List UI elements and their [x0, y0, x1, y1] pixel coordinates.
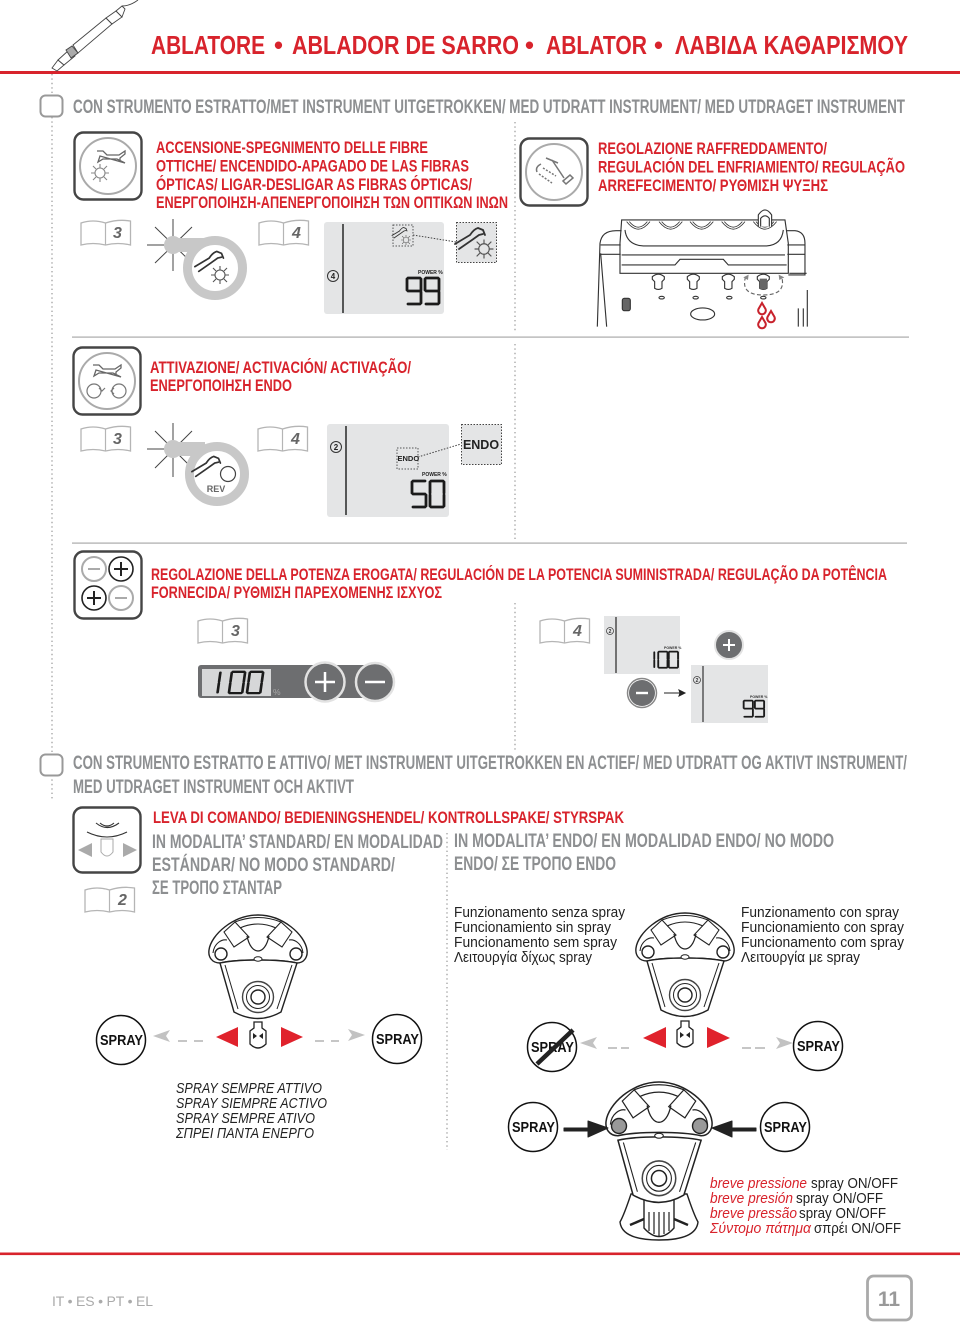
text: with spray [741, 905, 905, 966]
drawing: control unit with cooling adjustment [597, 210, 807, 327]
icon: control lever [74, 808, 140, 872]
text: endo mode [454, 831, 834, 875]
text: without spray: Funcionamiento sin spray [454, 920, 612, 936]
heading: fibre optics on/off: OTTICHE/ ENCENDIDO-APAGADO DE LAS FIBRAS [156, 158, 469, 176]
text: endo mode: ENDO/ ΣΕ ΤΡΟΠΟ ENDO [454, 854, 616, 875]
text: with spray: Funzionamento con spray [741, 905, 900, 921]
LCD: 100: POWER % [664, 646, 682, 650]
centre dotted guide [514, 122, 516, 752]
heading: control lever: LEVA DI COMANDO/ BEDIENINGSHENDEL/ KONTROLLSPAKE/ STYRSPAK [153, 809, 624, 827]
text: with spray: Λειτουργία με spray [741, 950, 861, 966]
LCD: endo 50 [327, 424, 461, 517]
spray disabled [528, 1022, 576, 1072]
lever dotted guide [446, 833, 448, 1150]
section rule [72, 336, 909, 338]
heading: instrument extracted and active [73, 753, 907, 798]
checkbox 1 [40, 96, 62, 116]
manual ref 2: 2 [117, 892, 127, 909]
manual ref 3: 3 [113, 225, 122, 242]
grey arrows: standard mode [153, 1029, 365, 1042]
LCD: 100 [604, 616, 682, 674]
left dotted guide [51, 74, 53, 800]
footer rule [0, 1252, 960, 1255]
text: short press spray on/off: spray ON/OFF [796, 1191, 883, 1207]
LCD: 99 [691, 665, 768, 723]
manual ref 4: 4 [290, 431, 300, 448]
text: with spray: Funcionamento com spray [741, 935, 905, 951]
foot pedal: spray toggle [606, 1082, 712, 1240]
manual ref 3 [81, 426, 130, 451]
LCD: endo 50: 2 [334, 443, 339, 452]
heading: fibre optics on/off: ACCENSIONE-SPEGNIMENTO DELLE FIBRE [156, 139, 428, 157]
icon: water drops [758, 303, 775, 328]
text: short press spray on/off: spray ON/OFF [799, 1206, 886, 1222]
LCD: fibre optics 99: POWER % [418, 270, 443, 276]
heading: power regulation: FORNECIDA/ ΡΥΘΜΙΣΗ ΠΑΡΕΧΟΜΕΝΗΣ ΙΣΧΥΟΣ [151, 584, 442, 602]
control panel display 100: % [273, 687, 281, 697]
text: standard mode: IN MODALITA’ STANDARD/ EN MODALIDAD [152, 832, 443, 853]
callout: ENDO symbol: ENDO [463, 438, 499, 452]
text: spray always active: SPRAY SEMPRE ATIVO [176, 1111, 315, 1127]
flashing button: REV: REV [207, 484, 225, 494]
LCD: endo 50: ENDO [398, 454, 419, 463]
icon: endo activation [74, 348, 140, 414]
title: ABLATORE [151, 32, 265, 60]
spray button bottom left: SPRAY [512, 1120, 555, 1136]
text: short press spray on/off: breve pressione [710, 1176, 807, 1192]
text: without spray [454, 905, 626, 966]
press arrow right [712, 1121, 756, 1137]
manual ref 3 [198, 618, 248, 643]
checkbox 2 [40, 754, 62, 776]
text: without spray: Funzionamento senza spray [454, 905, 626, 921]
spray active [794, 1022, 842, 1070]
press arrow left [564, 1121, 608, 1137]
spray disabled: SPRAY [531, 1040, 574, 1056]
manual ref 4: 4 [572, 623, 582, 640]
text: standard mode: ΣΕ ΤΡΟΠΟ ΣΤΑΝΤΑΡ [152, 878, 282, 899]
text: short press spray on/off: breve pressão [710, 1206, 797, 1222]
header rule [0, 71, 960, 74]
red arrows: endo mode [643, 1027, 730, 1048]
spray button bottom right: SPRAY [764, 1120, 807, 1136]
manual ref 4 [259, 220, 308, 245]
heading: power regulation [151, 564, 887, 602]
title: • [654, 32, 663, 60]
text: short press spray on/off: spray ON/OFF [811, 1176, 898, 1192]
control panel display 100 [198, 662, 394, 702]
title: ABLATOR [546, 32, 647, 60]
callout: fibre optics symbol [455, 222, 496, 262]
spray button bottom right [760, 1102, 810, 1152]
text: without spray: Λειτουργία δίχως spray [454, 950, 593, 966]
flashing button: REV [147, 423, 244, 502]
manual ref 3: 3 [113, 431, 122, 448]
title: ABLADOR DE SARRO [292, 32, 519, 60]
text: spray always active: SPRAY SEMPRE ATTIVO [176, 1081, 322, 1097]
foot pedal: endo mode [636, 913, 734, 1047]
LCD: 99: 2 [696, 678, 699, 684]
LCD: 100: 2 [609, 629, 612, 635]
manual ref 4 [540, 618, 590, 643]
section rule [72, 542, 907, 544]
spray button right [372, 1014, 422, 1064]
manual ref 4 [258, 426, 308, 451]
heading: endo activation: ΕΝΕΡΓΟΠΟΙΗΣΗ ENDO [150, 377, 292, 395]
spray button right: SPRAY [376, 1032, 419, 1048]
LCD: 99: POWER % [750, 695, 768, 699]
button: plus [715, 631, 743, 659]
red arrows: standard mode [216, 1027, 303, 1047]
icon: cooling [520, 138, 588, 206]
heading: endo activation: ATTIVAZIONE/ ACTIVACIÓN/ ACTIVAÇÃO/ [150, 357, 411, 377]
manual ref 2 [85, 887, 134, 912]
heading: cooling: ARREFECIMENTO/ ΡΥΘΜΙΣΗ ΨΥΞΗΣ [598, 177, 828, 195]
LCD: endo 50: POWER % [422, 472, 447, 478]
callout: ENDO symbol [462, 424, 502, 464]
text: spray always active: ΣΠΡΕΙ ΠΑΝΤΑ ΕΝΕΡΓΟ [175, 1126, 314, 1142]
spray button left: SPRAY [100, 1033, 143, 1049]
icon: fibre optics [74, 132, 142, 200]
text: short press spray on/off: σπρέι ON/OFF [814, 1221, 901, 1237]
text: spray always active: SPRAY SIEMPRE ACTIVO [176, 1096, 327, 1112]
title: • [525, 32, 534, 60]
flashing button: fibre optics [147, 219, 242, 296]
page number: 11 [878, 1288, 900, 1311]
text: short press spray on/off [709, 1176, 901, 1237]
icon: power +/- [74, 552, 142, 618]
manual ref 3: 3 [231, 623, 240, 640]
text: spray always active [175, 1081, 327, 1142]
text: standard mode [152, 832, 443, 899]
heading: fibre optics on/off: ΕΝΕΡΓΟΠΟΙΗΣΗ-ΑΠΕΝΕΡΓΟΠΟΙΗΣΗ ΤΩΝ ΟΠΤΙΚΩΝ ΙΝΩΝ [156, 194, 508, 212]
spray button left [96, 1016, 146, 1064]
text: endo mode: IN MODALITA’ ENDO/ EN MODALIDAD ENDO/ NO MODO [454, 831, 834, 852]
heading: instrument extracted and active: MED UTDRAGET INSTRUMENT OCH AKTIVT [73, 777, 354, 798]
heading: cooling: REGOLAZIONE RAFFREDDAMENTO/ [598, 140, 827, 158]
heading: fibre optics on/off: ÓPTICAS/ LIGAR-DESLIGAR AS FIBRAS ÓPTICAS/ [156, 175, 472, 194]
heading: cooling [598, 140, 905, 195]
grey arrows: endo mode [580, 1037, 793, 1049]
arrow [664, 690, 685, 696]
footer languages: IT • ES • PT • EL [52, 1293, 153, 1309]
spray active: SPRAY [797, 1039, 840, 1055]
LCD: fibre optics 99: 4 [331, 272, 336, 281]
button: minus [628, 678, 656, 708]
icon: scaler handpiece [52, 0, 138, 71]
heading: fibre optics on/off [156, 139, 508, 212]
heading: endo activation [150, 357, 411, 395]
title: ΛΑΒΙΔΑ ΚΑΘΑΡΙΣΜΟΥ [675, 32, 908, 60]
text: short press spray on/off: Σύντομο πάτημα [709, 1221, 812, 1237]
title [151, 32, 908, 60]
LCD: fibre optics 99 [324, 222, 456, 314]
text: short press spray on/off: breve presión [710, 1191, 793, 1207]
text: with spray: Funcionamiento con spray [741, 920, 905, 936]
page number [868, 1276, 912, 1320]
text: without spray: Funcionamento sem spray [454, 935, 618, 951]
spray button bottom left [508, 1102, 558, 1152]
foot pedal: standard mode [209, 915, 307, 1048]
manual ref 4: 4 [291, 225, 301, 242]
title: • [274, 32, 283, 60]
manual ref 3 [81, 220, 130, 245]
text: standard mode: ESTÁNDAR/ NO MODO STANDARD/ [152, 854, 396, 876]
